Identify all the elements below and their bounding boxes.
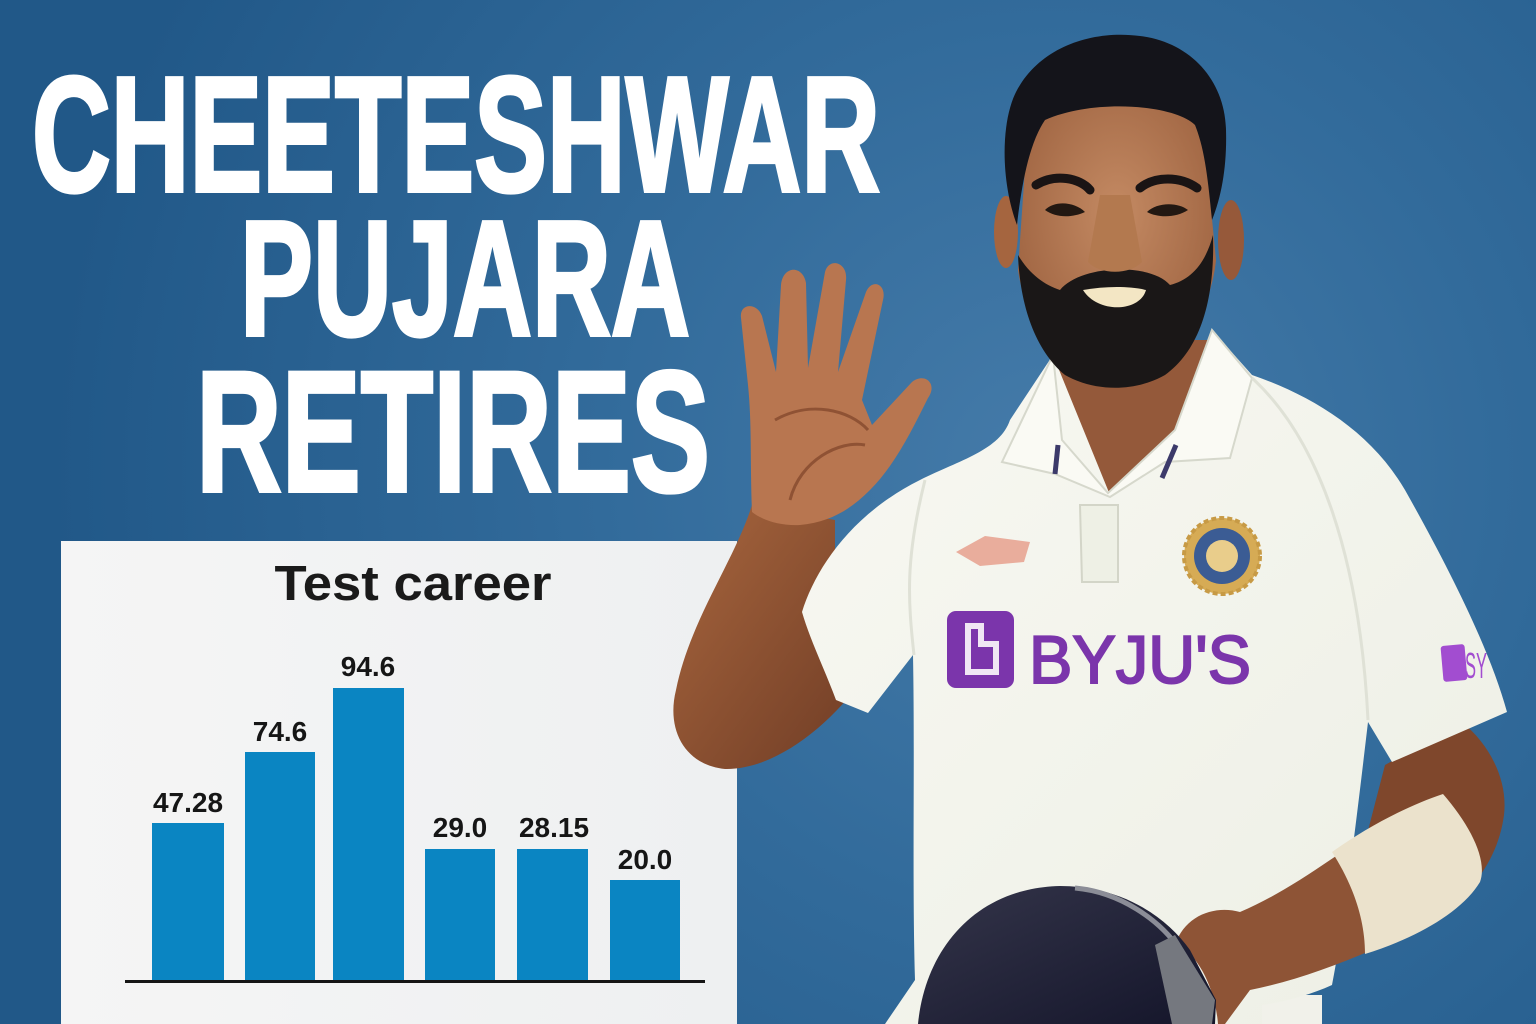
trousers bbox=[1262, 995, 1322, 1024]
bar chart bbox=[125, 651, 705, 983]
title bbox=[32, 43, 880, 528]
bar chart: 74.6 bbox=[253, 716, 307, 747]
player figure: SY bbox=[1465, 645, 1487, 686]
collar bbox=[1002, 330, 1252, 497]
bandage bbox=[1332, 794, 1482, 954]
face bbox=[1018, 95, 1216, 375]
upper right arm bbox=[1350, 722, 1505, 925]
right ear bbox=[1218, 200, 1244, 280]
eyes bbox=[1045, 203, 1188, 216]
sponsor logo bbox=[947, 611, 1251, 698]
mouth bbox=[1083, 287, 1146, 307]
shirt bbox=[802, 330, 1507, 1024]
hair bbox=[1005, 35, 1226, 225]
nose bbox=[1088, 195, 1142, 272]
player figure bbox=[673, 35, 1507, 1024]
title: CHEETESHWAR bbox=[32, 43, 880, 226]
bar chart: 20.0 bbox=[618, 844, 672, 875]
placket bbox=[1080, 505, 1118, 582]
chart heading: Test career bbox=[274, 557, 552, 611]
collar stripes bbox=[1055, 445, 1176, 478]
bar chart: 29.0 bbox=[433, 812, 487, 843]
left ear bbox=[994, 196, 1018, 268]
bar chart: 94.6 bbox=[341, 651, 395, 682]
panel: test career chart bbox=[61, 541, 737, 1024]
beard bbox=[1018, 235, 1213, 388]
waving hand bbox=[741, 263, 932, 525]
bar chart: 28.15 bbox=[519, 812, 589, 843]
title: RETIRES bbox=[196, 336, 710, 528]
bar chart: 47.28 bbox=[153, 787, 223, 818]
icon: team crest bbox=[1184, 518, 1260, 594]
title: PUJARA bbox=[240, 187, 690, 370]
sleeve sponsor bbox=[1440, 644, 1487, 686]
sponsor logo: BYJU'S bbox=[1029, 622, 1251, 698]
kit maker logo bbox=[956, 536, 1030, 566]
lower right arm bbox=[1175, 850, 1372, 1024]
palm creases bbox=[775, 409, 868, 500]
sleeve seam bbox=[910, 378, 1368, 720]
helmet bbox=[918, 886, 1216, 1024]
neck bbox=[1050, 340, 1215, 498]
eyebrows bbox=[1036, 178, 1197, 190]
raised arm bbox=[673, 505, 862, 769]
